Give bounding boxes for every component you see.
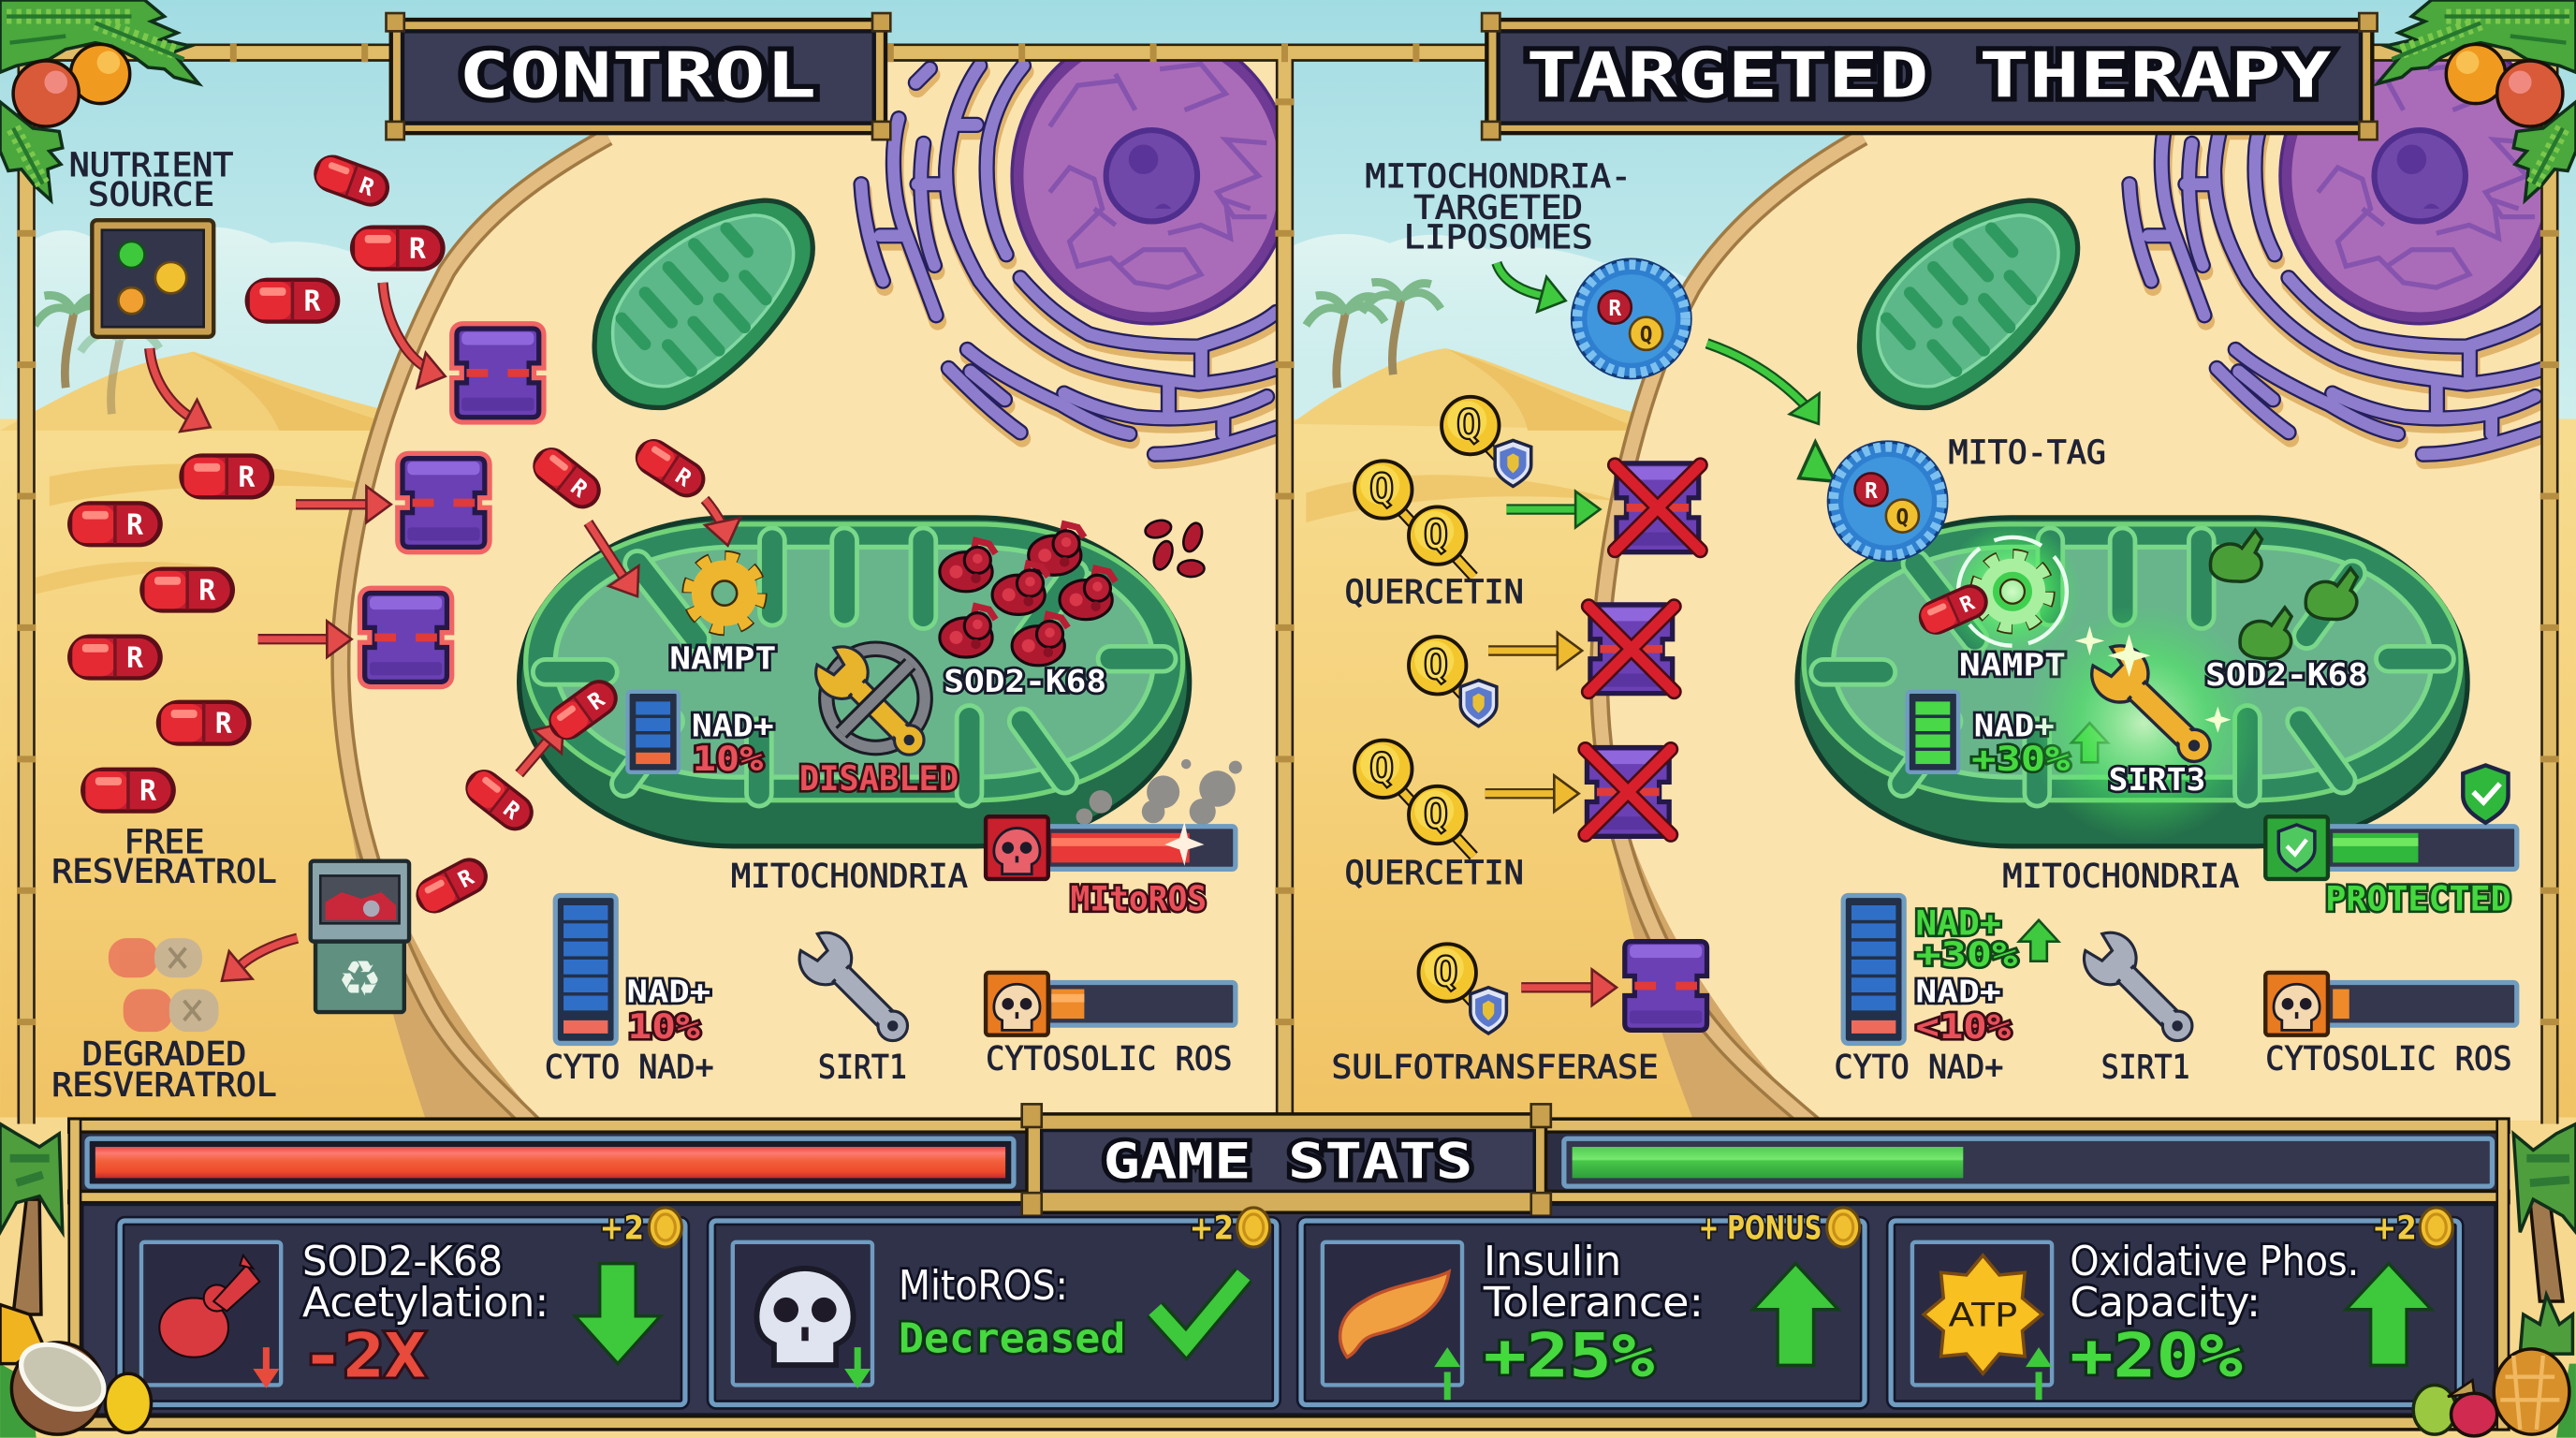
blocked transporter 2	[1588, 605, 1674, 694]
label: mito NAD 10 percent	[692, 707, 774, 779]
label: SIRT1 therapy: SIRT1	[2101, 1048, 2190, 1086]
card: oxidative phosphorylation: Oxidative Phos.	[2070, 1238, 2359, 1285]
decoration: bottom-left palm	[0, 1123, 63, 1314]
decoration: top-right palm and fruit	[2378, 0, 2576, 200]
icon: cytosolic NAD battery	[555, 895, 616, 1043]
header: targeted therapy: TARGETED THERAPY	[1526, 39, 2331, 112]
card: oxidative phosphorylation: +2	[2372, 1209, 2417, 1247]
header: control: CONTROL	[459, 39, 816, 112]
label: mitochondria control: MITOCHONDRIA	[731, 858, 968, 896]
label: cyto NAD plus 30: NAD+	[1915, 903, 2001, 944]
card: MitoROS decreased: MitoROS:	[899, 1262, 1068, 1310]
icon: pancreas	[1340, 1271, 1449, 1357]
label: SIRT1 control: SIRT1	[818, 1048, 907, 1086]
icon: NAMPT activated gear	[1978, 557, 2047, 626]
icon: mito NAD battery low	[627, 692, 679, 772]
card: SOD2-K68 acetylation: -2X	[302, 1322, 426, 1392]
label: quercetin 2: QUERCETIN	[1345, 854, 1524, 892]
free resveratrol pills: R	[498, 796, 525, 825]
bar: MitoROS high	[986, 816, 1236, 879]
label: cyto NAD 10 percent: NAD+	[627, 974, 710, 1010]
label: degraded resveratrol	[51, 1034, 277, 1105]
label: cyto NAD plus 30: +30%	[1915, 934, 2017, 975]
quercetin group 3: Q	[1369, 744, 1394, 792]
free resveratrol pills: R	[238, 461, 255, 493]
icon: disabled wrench	[807, 638, 938, 769]
label: mito NAD plus 30 percent: +30%	[1971, 739, 2070, 779]
bottom panel: stats frame	[69, 1119, 2509, 1430]
icon: big up arrow	[2346, 1264, 2431, 1365]
label: mito NAD plus 30 percent: NAD+	[1974, 707, 2055, 743]
icon: big down arrow	[575, 1264, 661, 1364]
arrows: green liposome delivery	[1497, 263, 1834, 527]
bar: MitoROS protected	[2265, 816, 2517, 879]
card: MitoROS decreased: Decreased	[899, 1314, 1125, 1362]
card: SOD2-K68 acetylation: +2	[600, 1209, 644, 1247]
organelle: therapy nucleus and endoplasmic reticulum	[2130, 28, 2559, 461]
label: MitoROS: MItoROS	[1070, 878, 1207, 918]
icon: acetylated SOD2 clumps	[940, 518, 1206, 666]
label: NAMPT therapy: NAMPT	[1959, 646, 2066, 682]
label: free resveratrol: FREE	[124, 823, 205, 861]
small desert palm trees	[35, 282, 1441, 414]
icon: entering pill: R	[583, 686, 610, 715]
bar: cytosolic ROS low	[986, 973, 1236, 1035]
icon: nutrient source box	[92, 220, 213, 337]
decoration: bottom-right palm	[2513, 1123, 2576, 1301]
card: MitoROS decreased: +2	[1190, 1209, 1234, 1247]
icon: liposome with mito tag: R	[1865, 479, 1878, 504]
label: free resveratrol: RESVERATROL	[51, 852, 277, 890]
label: mitochondria-targeted liposomes	[1365, 157, 1632, 257]
label: mitochondria therapy: MITOCHONDRIA	[2002, 858, 2239, 896]
label: cytosolic ROS therapy: CYTOSOLIC ROS	[2265, 1040, 2511, 1078]
label: NAMPT control: NAMPT	[669, 639, 776, 676]
card: SOD2-K68 acetylation: SOD2-K68	[302, 1238, 503, 1285]
free resveratrol pills: R	[454, 863, 478, 893]
label: cyto NAD below 10: NAD+	[1915, 974, 2001, 1010]
arrow: red to sulfotransferase	[1521, 969, 1617, 1005]
label: free resveratrol	[51, 823, 277, 890]
label: mito NAD 10 percent: 10%	[693, 739, 763, 779]
icon: entering pill	[542, 672, 625, 747]
organelle: small mitochondrion control	[594, 200, 812, 407]
card: insulin tolerance: Insulin	[1484, 1238, 1621, 1285]
icon: liposome with mito tag: Q	[1896, 506, 1909, 530]
quercetin group 1: Q	[1369, 465, 1394, 513]
header: targeted therapy	[1482, 13, 2378, 139]
bar: cytosolic ROS therapy	[2265, 973, 2517, 1035]
label: nutrient source: SOURCE	[88, 175, 214, 213]
blocked transporter 3	[1586, 748, 1671, 836]
free resveratrol pills: R	[126, 508, 143, 541]
panel: therapy cell	[1600, 50, 2563, 1134]
arrow: yellow to transporter 2	[1488, 633, 1582, 668]
icon: protected shield	[2463, 765, 2509, 823]
card: insulin tolerance: +25%	[1484, 1322, 1654, 1392]
free resveratrol pills: R	[139, 775, 156, 808]
label: degraded resveratrol: RESVERATROL	[51, 1066, 277, 1105]
label: mito NAD 10 percent: NAD+	[692, 707, 774, 743]
label: mitochondria-targeted liposomes: MITOCHONDRIA-	[1365, 157, 1632, 196]
label: cyto NAD plus 30	[1915, 903, 2058, 975]
icon: check mark	[1155, 1275, 1244, 1344]
label: SOD2-K68 control: SOD2-K68	[944, 663, 1106, 699]
mitochondrion: control body	[520, 518, 1190, 846]
icon: degraded resveratrol	[109, 938, 218, 1032]
free resveratrol pills: R	[304, 286, 321, 318]
arrows: control panel uptake	[150, 283, 745, 995]
blocked transporter 1	[1615, 463, 1701, 552]
free resveratrol pills: R	[565, 474, 593, 503]
label: mitochondria-targeted liposomes: TARGETED	[1413, 188, 1583, 227]
label: SIRT3: SIRT3	[2109, 761, 2205, 798]
bamboo frame	[26, 50, 2550, 1123]
mitochondrion: therapy body with glow	[1797, 518, 2467, 846]
icon: ATP burst	[1924, 1255, 2042, 1373]
label: cyto NAD 10 percent	[627, 974, 710, 1047]
icon: red SOD2 strand	[159, 1255, 259, 1357]
icon: released pill	[1913, 579, 1994, 640]
card: MitoROS decreased	[711, 1208, 1277, 1405]
icon: SIRT1 wrench therapy	[2075, 924, 2206, 1055]
icon: liposome: R	[1608, 297, 1621, 321]
organelle: small mitochondrion therapy	[1859, 200, 2078, 407]
bar: therapy green	[1564, 1138, 2492, 1186]
decoration: bottom-right fruit	[2413, 1295, 2576, 1438]
label: protected: PROTECTED	[2325, 878, 2511, 918]
label: disabled: DISABLED	[799, 758, 959, 799]
card: SOD2-K68 acetylation: Acetylation:	[302, 1279, 549, 1327]
icon: liposome	[1573, 259, 1690, 378]
icon: mito NAD battery charged	[1908, 692, 1958, 772]
free resveratrol pills: R	[409, 233, 426, 266]
header: game stats: GAME STATS	[1104, 1133, 1472, 1190]
card: oxidative phosphorylation: Capacity:	[2070, 1279, 2261, 1327]
header: game stats	[1022, 1104, 1551, 1216]
icon: SIRT1 wrench control	[791, 924, 922, 1055]
label: mito-tag: MITO-TAG	[1949, 433, 2106, 472]
card: insulin tolerance	[1301, 1208, 1865, 1405]
icon: skull	[756, 1269, 854, 1365]
icon: SIRT3 wrench with glow	[2026, 605, 2262, 842]
icon: repaired SOD2	[2210, 531, 2357, 659]
sulfotransferase transporter	[1625, 942, 1707, 1030]
quercetin group 1: Q	[1456, 402, 1481, 449]
icon: cytosolic NAD battery therapy	[1843, 895, 1904, 1043]
quercetin group 3: Q	[1424, 791, 1448, 839]
decoration: bottom-left tropical fruit	[0, 1304, 152, 1438]
label: nutrient source	[69, 146, 233, 213]
card: SOD2-K68 acetylation	[120, 1208, 685, 1405]
icon: ATP burst: ATP	[1949, 1296, 2017, 1334]
label: cytosolic ROS control: CYTOSOLIC ROS	[986, 1040, 1232, 1078]
label: sulfotransferase: SULFOTRANSFERASE	[1332, 1048, 1659, 1086]
label: cyto NAD below 10	[1915, 974, 2011, 1047]
card: oxidative phosphorylation: +20%	[2070, 1322, 2243, 1392]
free resveratrol pills: R	[356, 171, 378, 201]
label: cyto NAD+ therapy: CYTO NAD+	[1835, 1048, 2003, 1086]
free resveratrol pills: R	[215, 708, 232, 741]
icon: NAMPT gear control	[690, 559, 759, 627]
icon: released pill: R	[1956, 591, 1979, 618]
quercetin group 3	[1354, 741, 1473, 856]
icon: liposome with mito tag	[1799, 442, 1947, 560]
icon: recycling bin	[311, 861, 409, 1012]
header: control	[386, 13, 890, 139]
quercetin group 2: Q	[1424, 641, 1448, 689]
icon: smoke	[1076, 759, 1242, 825]
label: mitochondria-targeted liposomes: LIPOSOMES	[1404, 218, 1593, 257]
free resveratrol pills: R	[670, 462, 696, 492]
transporters with red glow	[365, 329, 539, 682]
label: SOD2-K68 therapy: SOD2-K68	[2205, 656, 2368, 693]
bar: control red	[87, 1138, 1014, 1186]
icon: big up arrow	[1753, 1264, 1838, 1365]
panel: control cell	[341, 50, 1298, 1134]
decoration: top-left palm and fruit	[0, 0, 198, 200]
card: insulin tolerance: Tolerance:	[1483, 1279, 1704, 1327]
card: oxidative phosphorylation	[1891, 1208, 2459, 1405]
label: mito NAD plus 30 percent	[1971, 707, 2108, 779]
label: cyto NAD below 10: <10%	[1915, 1006, 2011, 1047]
quercetin group 1	[1354, 397, 1531, 577]
quercetin group 2	[1409, 637, 1497, 726]
icon: liposome: Q	[1640, 323, 1652, 347]
label: nutrient source: NUTRIENT	[69, 146, 233, 184]
label: degraded resveratrol: DEGRADED	[82, 1034, 246, 1073]
quercetin group 4: Q	[1433, 948, 1458, 996]
free resveratrol pills	[67, 150, 712, 919]
label: quercetin 1: QUERCETIN	[1345, 573, 1524, 611]
card: insulin tolerance: + PONUS	[1699, 1209, 1822, 1247]
icon: recycling bin: ♻	[338, 951, 382, 1008]
organelle: control nucleus and endoplasmic reticulum	[861, 28, 1292, 461]
free resveratrol pills: R	[126, 642, 143, 675]
label: cyto NAD+ control: CYTO NAD+	[545, 1048, 714, 1086]
quercetin group 4	[1419, 944, 1506, 1034]
arrow: yellow to transporter 3	[1486, 775, 1579, 812]
quercetin group 1: Q	[1424, 511, 1448, 559]
free resveratrol pills: R	[198, 575, 215, 608]
label: cyto NAD 10 percent: 10%	[627, 1006, 700, 1047]
